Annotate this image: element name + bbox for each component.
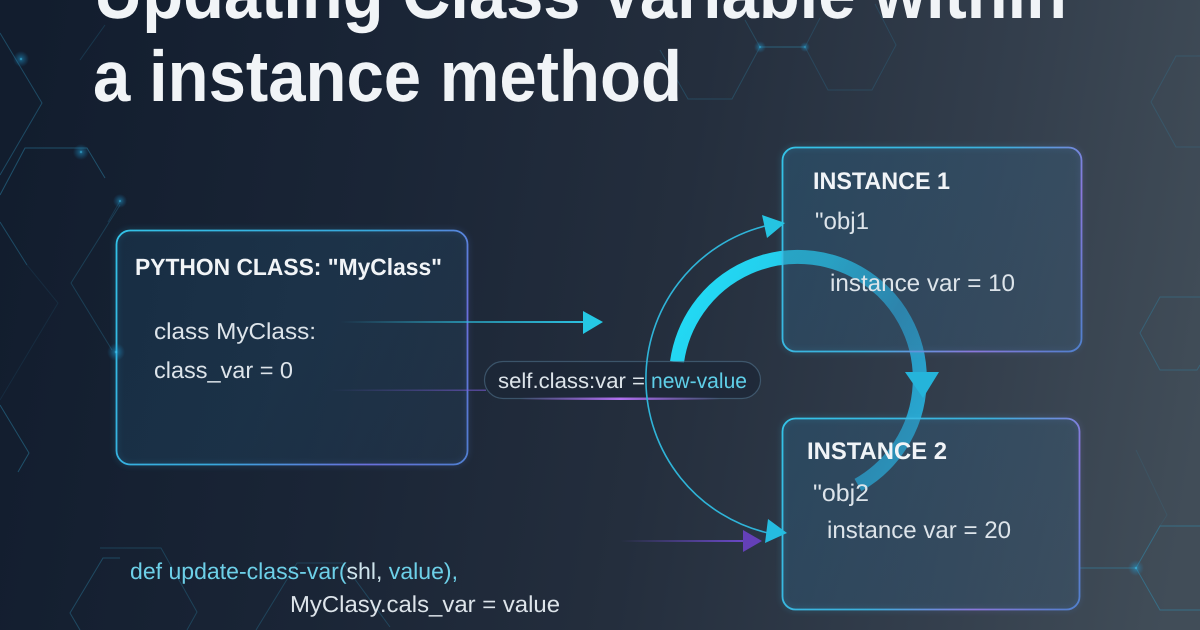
label: obj1: "obj1: [815, 208, 869, 235]
arrowhead: to instance 2: [765, 519, 787, 543]
panel: instance 1: [782, 148, 1082, 352]
label: obj2: "obj2: [813, 480, 869, 507]
code: instance var 20: instance var = 20: [827, 517, 1011, 544]
heading: instance 1: INSTANCE 1: [813, 168, 950, 195]
title: a instance method: [93, 37, 682, 117]
pill: self.class var expression: [484, 362, 760, 400]
text: new-value: new-value: [651, 369, 747, 393]
arrow: thick curved arc from pill to instance 2: [677, 257, 939, 485]
arrow: class to right: [340, 311, 603, 334]
code: method body: MyClasy.cals_var = value: [290, 591, 560, 617]
heading: python class: PYTHON CLASS: "MyClass": [135, 254, 442, 280]
text: self.class:var =: self.class:var =: [498, 369, 645, 393]
code: instance var 10: instance var = 10: [830, 270, 1015, 297]
arrowhead: to instance 1: [762, 215, 785, 238]
heading: instance 2: INSTANCE 2: [807, 438, 947, 465]
panel: instance 2: [782, 418, 1080, 610]
arrow: thin arc to both instances: [646, 215, 787, 543]
connector: class to pill: [330, 390, 486, 391]
panel: python class: [107, 230, 468, 464]
code: method definition: [130, 558, 560, 617]
title: [93, 0, 1067, 117]
arrow: purple to instance 2: [620, 530, 762, 552]
code: class variable: class_var = 0: [154, 357, 293, 383]
code: method definition: def update-class-var(shl, value),: [130, 558, 458, 584]
code: class definition: class MyClass:: [154, 318, 316, 344]
